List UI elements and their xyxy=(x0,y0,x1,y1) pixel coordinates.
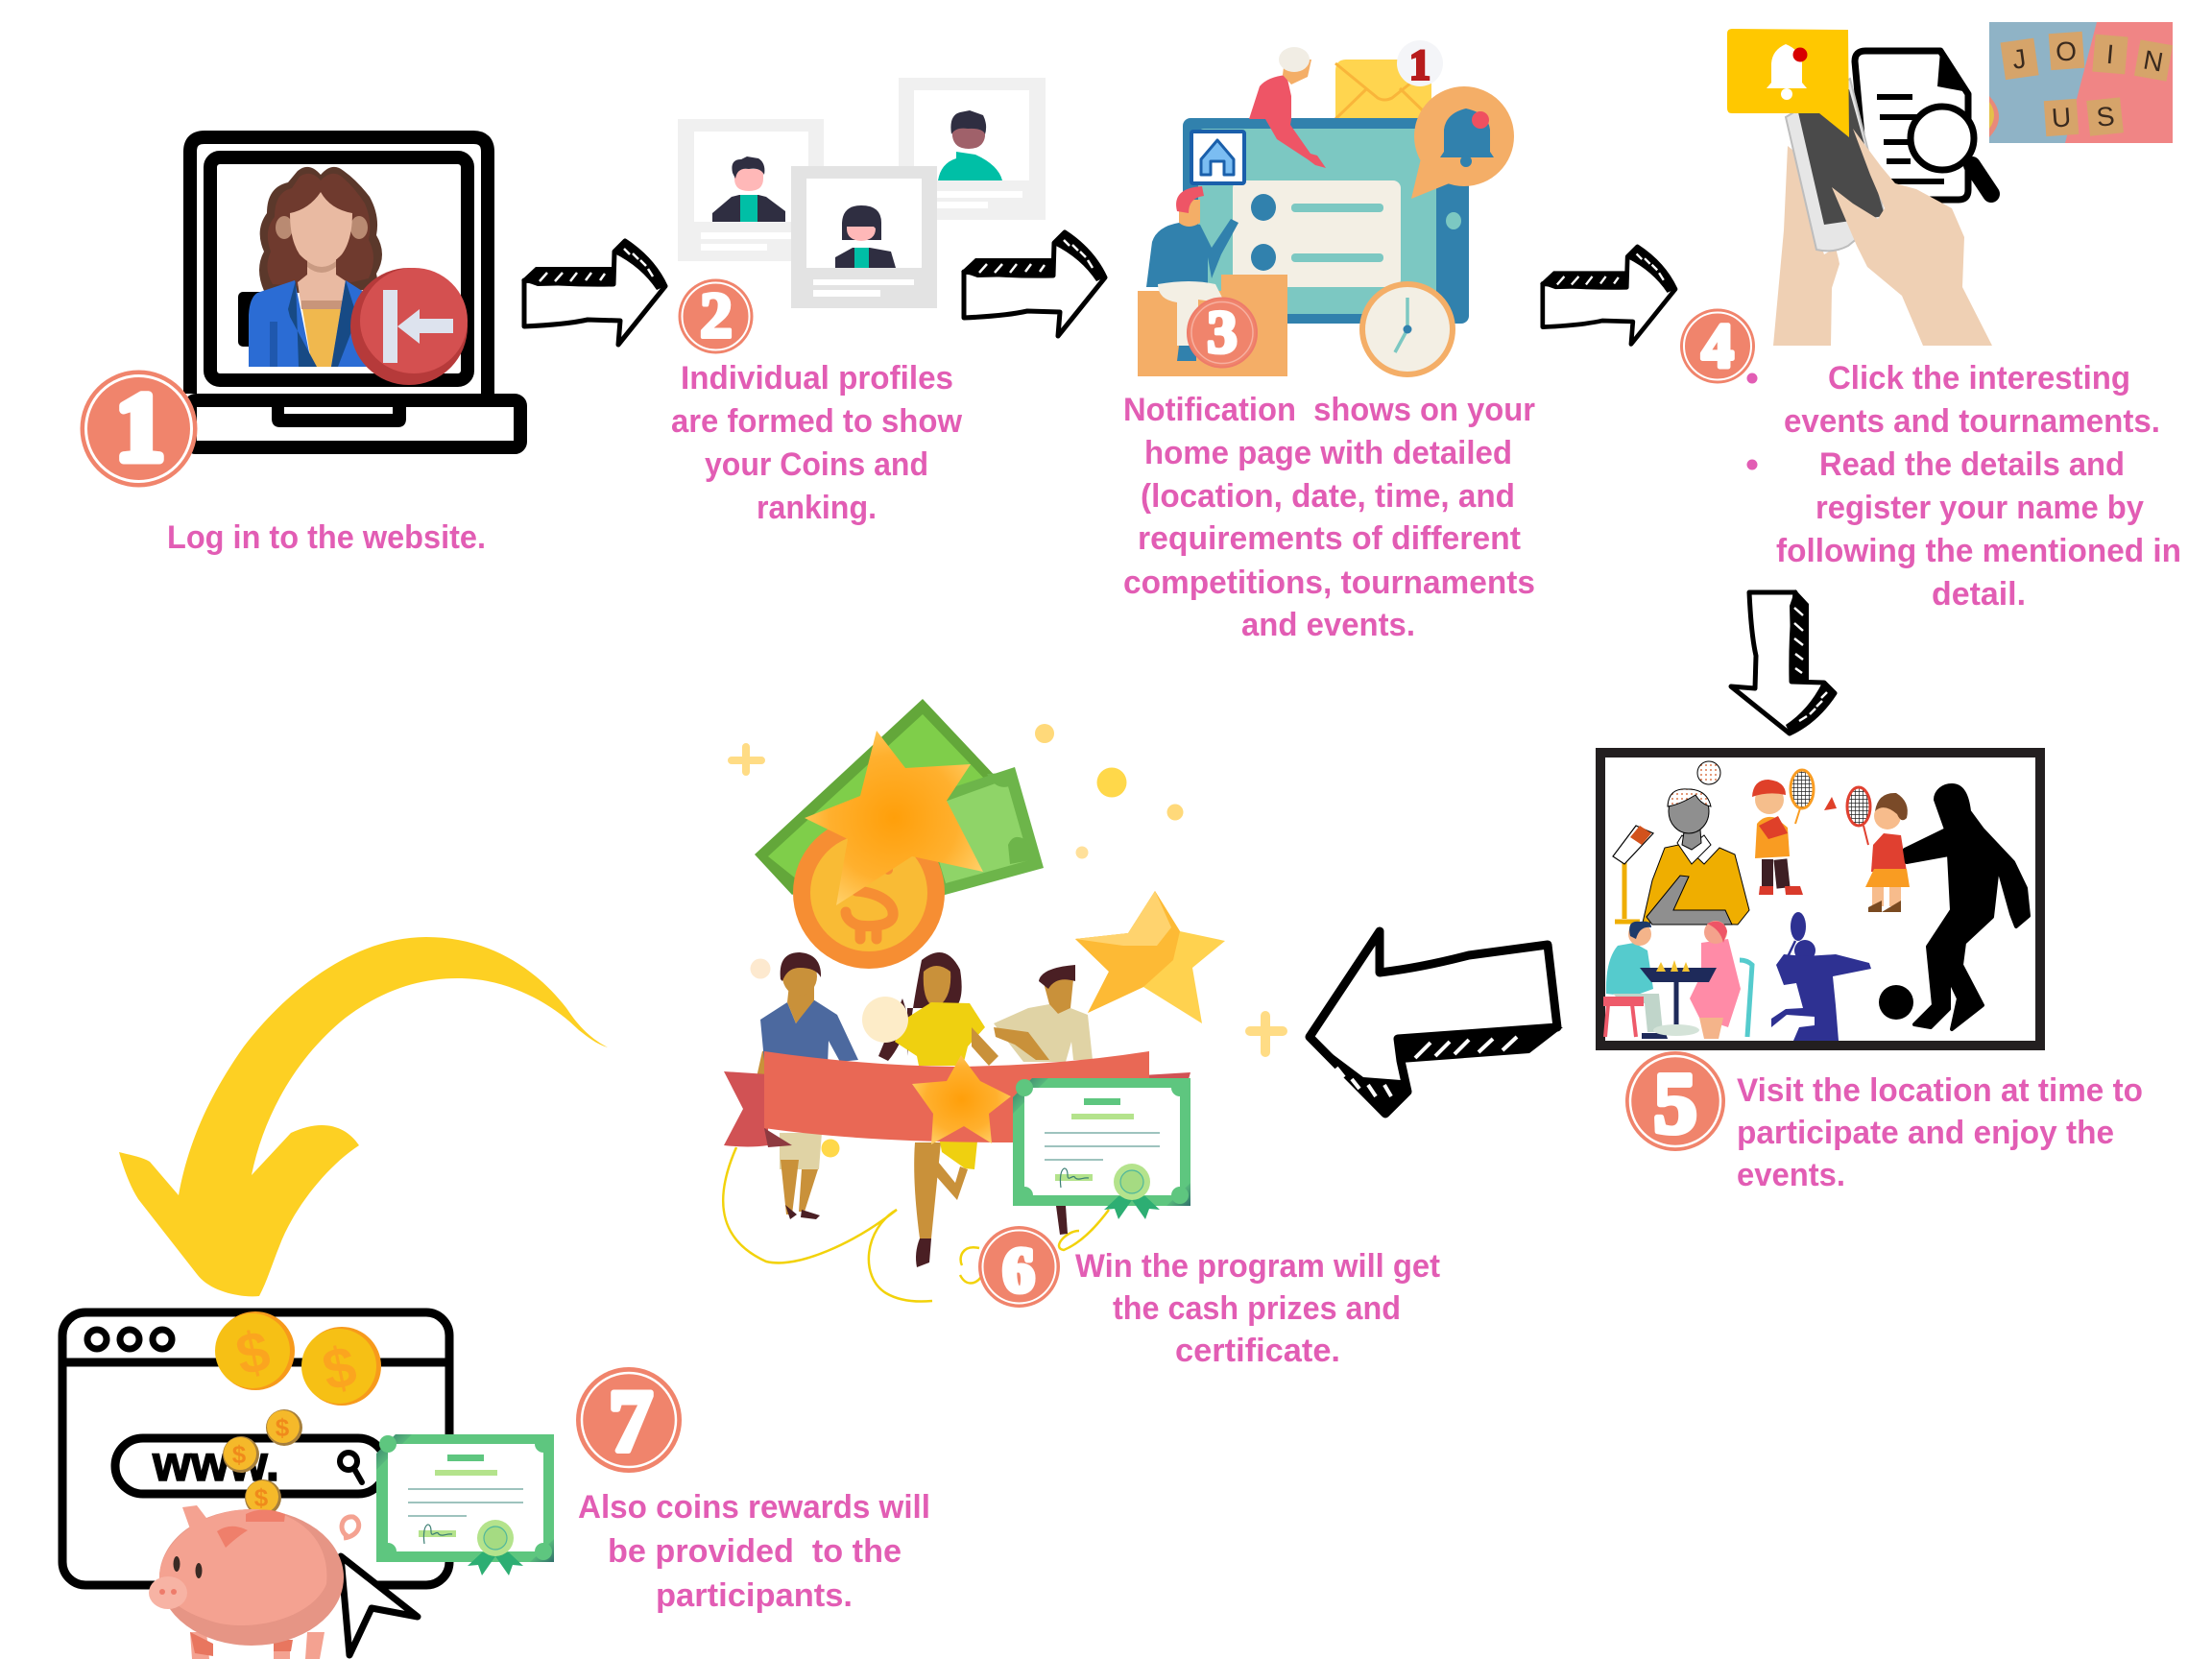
large star xyxy=(805,731,983,905)
notification count badge: 1 xyxy=(1409,41,1431,88)
content card xyxy=(1233,180,1401,287)
chess players xyxy=(1605,921,1752,1039)
bell bubble xyxy=(1411,86,1514,199)
join us photo: O xyxy=(2055,36,2078,67)
badge 3: 3 xyxy=(1207,299,1238,366)
badge 5 xyxy=(1625,1051,1725,1151)
step 6 caption: certificate. xyxy=(1175,1333,1340,1369)
step 5 caption: participate and enjoy the xyxy=(1737,1115,2114,1151)
picture frame xyxy=(1600,753,2040,1046)
notification count badge xyxy=(1397,40,1443,88)
bank notes xyxy=(755,699,1044,897)
step 4 caption with bullets: register your name by xyxy=(1815,490,2144,526)
step 5 caption: events. xyxy=(1737,1157,1845,1193)
piggy bank xyxy=(149,1505,359,1659)
step 3: notification dashboard illustration xyxy=(1138,40,1514,376)
red banner ribbon xyxy=(724,1051,1190,1147)
yellow curved arrow xyxy=(119,937,608,1296)
right hand xyxy=(1832,129,1992,346)
woman avatar xyxy=(249,167,382,367)
woman in yellow shirt xyxy=(878,952,998,1267)
man in blue shirt xyxy=(757,952,858,1219)
clock xyxy=(1362,284,1453,374)
yellow flourish lines xyxy=(723,1147,1109,1302)
join us photo: J xyxy=(2010,43,2028,75)
football xyxy=(1879,985,1913,1020)
badge 6: 6 xyxy=(1002,1236,1035,1306)
shuttlecock xyxy=(1824,797,1837,810)
step 6 caption: Win the program will get xyxy=(1075,1248,1440,1285)
decorative blob xyxy=(862,997,908,1043)
boy with racket xyxy=(1752,770,1814,895)
laptop hinge notch xyxy=(272,407,406,427)
cursor xyxy=(341,1556,418,1655)
step 7 caption: participants. xyxy=(656,1577,853,1614)
sparkles and dots xyxy=(732,724,1283,1158)
football player silhouette xyxy=(1905,785,2029,1029)
step 7 caption xyxy=(578,1489,930,1614)
profile card back left xyxy=(678,119,824,261)
arrow 2 to 3 xyxy=(961,232,1105,336)
badge 6 xyxy=(978,1226,1060,1308)
person seated with folder xyxy=(1138,186,1287,376)
person at top with pointing hand xyxy=(1249,47,1326,168)
arrow 5 to 6 (left) xyxy=(1310,931,1563,1114)
step 2 caption: ranking. xyxy=(757,490,877,526)
step 6 caption: the cash prizes and xyxy=(1113,1290,1401,1327)
logout button icon xyxy=(350,268,468,385)
badge 3 xyxy=(1188,298,1257,367)
step 5 caption xyxy=(1737,1072,2143,1193)
small falling coins xyxy=(223,1409,302,1516)
envelope xyxy=(1335,60,1431,119)
search bar xyxy=(115,1436,386,1494)
girl with racket xyxy=(1847,787,1910,912)
yellow notification card with bell xyxy=(1727,29,1849,137)
browser window xyxy=(62,1312,449,1585)
step 5 caption: Visit the location at time to xyxy=(1737,1072,2143,1109)
arrow 3 to 4 xyxy=(1540,247,1675,344)
step 7 caption: be provided to the xyxy=(608,1533,902,1570)
badge 2 xyxy=(678,278,753,353)
step 7 caption: Also coins rewards will xyxy=(578,1489,930,1526)
step 4 caption with bullets: Click the interesting xyxy=(1828,360,2130,397)
large dollar coins xyxy=(215,1311,381,1406)
step 5: framed activities illustration xyxy=(1600,753,2040,1046)
step 4 caption with bullets: events and tournaments. xyxy=(1784,403,2160,440)
badge 5: 5 xyxy=(1653,1056,1697,1151)
man in beige shirt xyxy=(994,965,1093,1062)
join us photo: N xyxy=(2141,44,2166,78)
certificate xyxy=(376,1434,554,1575)
leg under certificate xyxy=(1056,1206,1068,1235)
step 3 caption: competitions, tournaments xyxy=(1123,565,1535,601)
badge 7: 7 xyxy=(609,1372,653,1470)
right star xyxy=(1075,891,1225,1023)
step 4 caption with bullets: detail. xyxy=(1932,576,2026,613)
step 2 caption: your Coins and xyxy=(705,446,928,483)
step 4 caption with bullets xyxy=(1747,360,2181,613)
badge 4: 4 xyxy=(1701,311,1734,381)
step 3 caption: home page with detailed xyxy=(1144,435,1512,471)
arrow 1 to 2 xyxy=(521,241,665,345)
arrow 4 to 5 (down) xyxy=(1731,589,1835,733)
step 1 caption: Log in to the website. xyxy=(167,519,486,556)
step 2 caption xyxy=(671,360,963,526)
laptop base xyxy=(190,400,520,447)
home icon xyxy=(1191,132,1244,183)
document with magnifier xyxy=(1855,51,1991,200)
badge 7 xyxy=(576,1367,682,1473)
step 4: phone hand and document illustration xyxy=(1727,22,2173,346)
step 7: website coins and piggy bank illustration xyxy=(62,1311,554,1659)
step 6 caption xyxy=(1075,1248,1440,1369)
tablet xyxy=(1183,118,1469,324)
step 3 caption: and events. xyxy=(1241,607,1415,643)
step 1: laptop with user login illustration xyxy=(190,137,520,447)
smartphone xyxy=(1786,79,1885,251)
step 2 caption: Individual profiles xyxy=(681,360,953,397)
join us photo: S xyxy=(2095,101,2116,132)
step 6: winners with banner illustration xyxy=(723,699,1283,1302)
badge 1 xyxy=(81,371,198,488)
laptop lid xyxy=(190,137,488,394)
badge 1: 1 xyxy=(115,373,165,482)
step 3 caption xyxy=(1123,392,1535,643)
step 2 caption: are formed to show xyxy=(671,403,963,440)
certificate xyxy=(1013,1078,1190,1219)
badge 4 xyxy=(1680,309,1755,384)
coin xyxy=(793,817,945,969)
left hand xyxy=(1773,146,1839,346)
step 2: profile cards illustration xyxy=(678,78,1046,308)
step 4 caption with bullets: following the mentioned in xyxy=(1776,533,2181,569)
step 3 caption: Notification shows on your xyxy=(1123,392,1535,428)
join us photo: I xyxy=(2105,39,2115,69)
profile card front xyxy=(791,166,937,308)
speaker woman at microphone xyxy=(1613,761,1749,925)
step 3 caption: requirements of different xyxy=(1138,520,1521,557)
search bar: www. xyxy=(152,1436,279,1492)
join us photo: U xyxy=(2051,102,2072,133)
step 3 caption: (location, date, time, and xyxy=(1141,478,1515,515)
small star xyxy=(912,1055,1011,1144)
profile card back right xyxy=(899,78,1046,220)
step 4 caption with bullets: Read the details and xyxy=(1819,446,2125,483)
badminton player silhouette xyxy=(1771,912,1871,1041)
badge 2: 2 xyxy=(700,278,733,351)
chair back xyxy=(238,292,267,347)
join us photo xyxy=(1989,22,2173,143)
